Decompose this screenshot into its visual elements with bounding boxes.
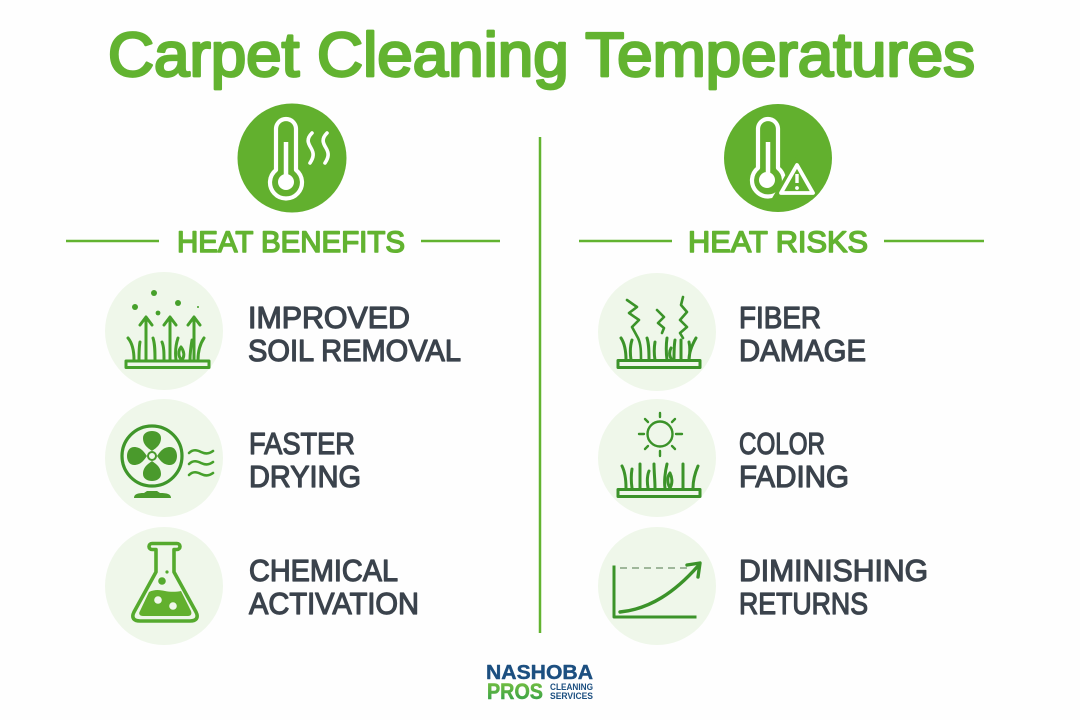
heading: heat risks: HEAT RISKS (688, 226, 868, 259)
icon: fiber damage (598, 273, 716, 391)
logo: nashoba pros: SERVICES (550, 691, 593, 701)
title: Carpet Cleaning Temperatures (108, 21, 975, 90)
logo: nashoba pros: CLEANING (550, 682, 593, 692)
label: color fading: FADING (739, 459, 849, 494)
icon: fan (105, 399, 223, 517)
icon: diminishing returns chart (598, 527, 716, 645)
label: color fading (739, 426, 849, 494)
label: improved soil removal (248, 300, 461, 368)
logo: nashoba pros: PROS (487, 679, 543, 704)
icon: chemical flask (105, 527, 223, 645)
label: fiber damage: FIBER (739, 300, 821, 335)
label: diminishing returns: DIMINISHING (739, 553, 928, 588)
label: diminishing returns (739, 553, 928, 621)
label: fiber damage (739, 300, 866, 368)
logo: nashoba pros: NASHOBA (486, 662, 593, 684)
panel: heat benefits (66, 104, 500, 645)
icon: soil removal (105, 272, 223, 390)
icon: thermometer with warning (724, 104, 832, 212)
label: faster drying (249, 426, 361, 494)
heading: heat benefits: HEAT BENEFITS (177, 226, 405, 259)
label: improved soil removal: SOIL REMOVAL (248, 333, 461, 368)
label: color fading: COLOR (739, 426, 825, 461)
label: chemical activation: CHEMICAL (249, 553, 398, 588)
label: faster drying: FASTER (249, 426, 355, 461)
label: diminishing returns: RETURNS (739, 586, 868, 621)
icon: thermometer with heat waves (238, 104, 346, 212)
label: fiber damage: DAMAGE (739, 333, 866, 368)
logo: nashoba pros (486, 662, 593, 704)
label: faster drying: DRYING (249, 459, 361, 494)
icon: color fading (598, 399, 716, 517)
panel: heat risks (579, 104, 984, 645)
label: chemical activation (249, 553, 419, 621)
label: chemical activation: ACTIVATION (249, 586, 419, 621)
label: improved soil removal: IMPROVED (248, 300, 410, 335)
